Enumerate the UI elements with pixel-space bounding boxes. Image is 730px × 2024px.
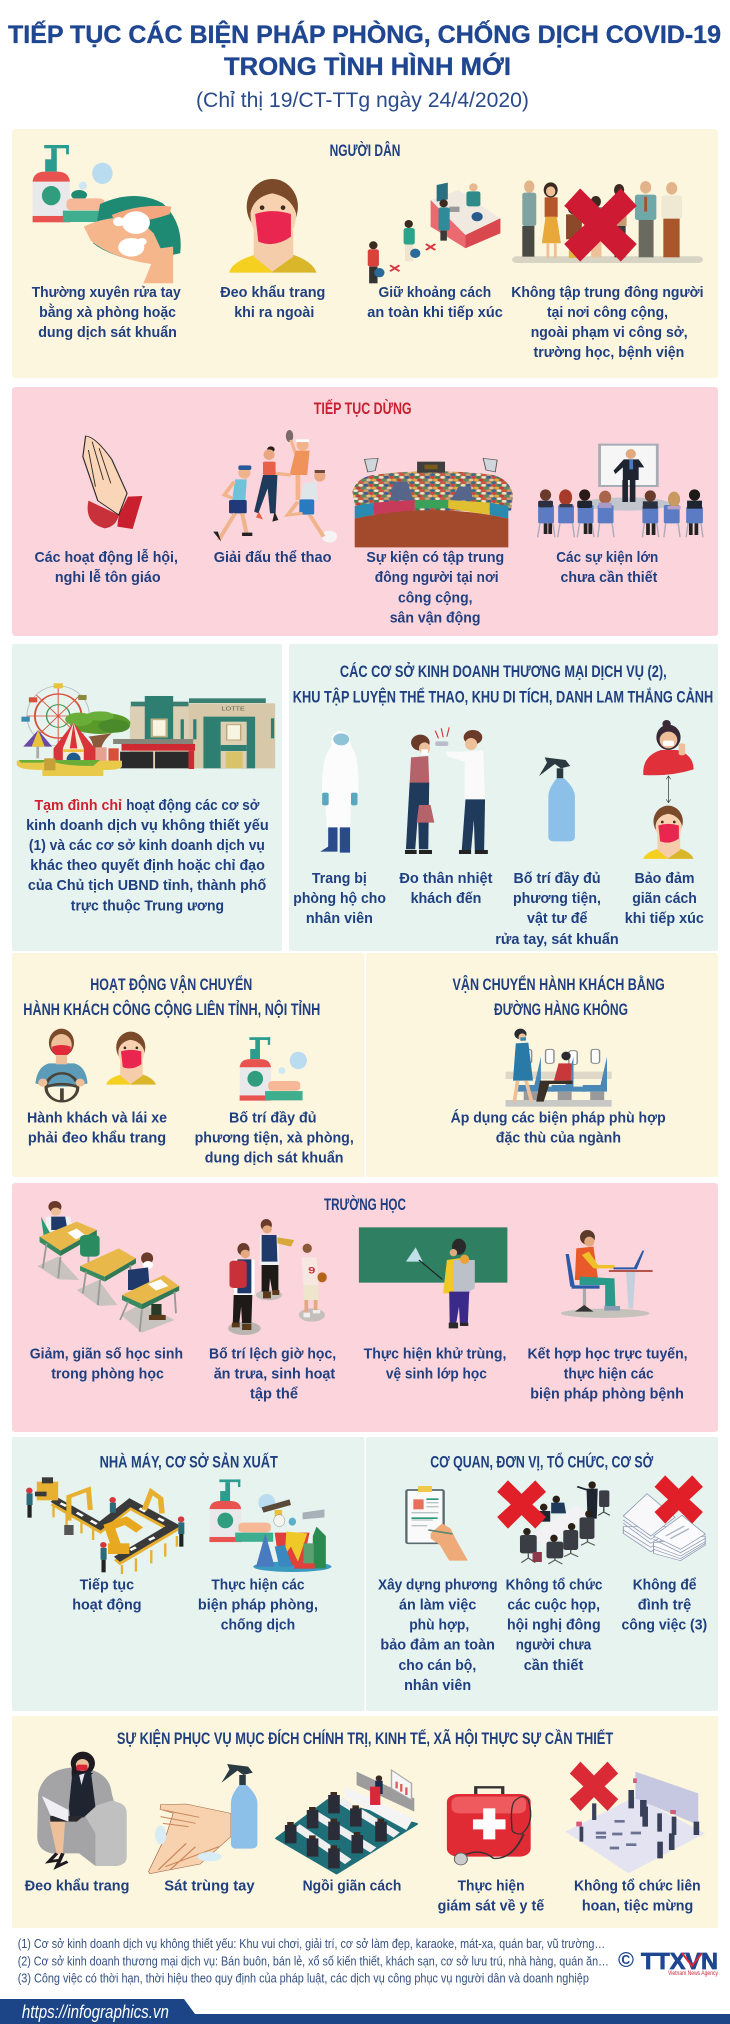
footnotes: (3) Công việc có thời hạn, thời hiệu theo quy định của pháp luật, các dịch vụ công phục vụ người dân và doanh nghiệp	[18, 1972, 589, 1986]
logo: TTXVN	[618, 1948, 718, 1977]
text: bố trí: Bố trí đầy đủ	[514, 870, 601, 887]
icon: driver and passenger with masks	[35, 1029, 156, 1101]
panel: cơ sở kinh doanh	[289, 644, 718, 951]
text: khử trùng: vệ sinh lớp học	[386, 1366, 487, 1382]
text: sát trùng tay: Sát trùng tay	[164, 1878, 255, 1894]
text: ngồi giãn cách: Ngồi giãn cách	[303, 1878, 401, 1894]
text: giám sát y tế: giám sát về y tế	[438, 1898, 545, 1914]
text: không để đình trệ	[622, 1576, 707, 1634]
text: không tổ chức liên hoan: Không tổ chức liên	[574, 1878, 701, 1894]
heading: hàng không: VẬN CHUYỂN HÀNH KHÁCH BẰNG	[452, 975, 665, 994]
text: giảm giãn: trong phòng học	[51, 1366, 164, 1382]
text: lễ hội: nghi lễ tôn giáo	[55, 569, 161, 586]
panel: cơ quan đơn vị	[366, 1437, 718, 1711]
footer bar: https://infographics.vn	[22, 2002, 169, 2022]
text: xây dựng phương án: phù hợp,	[409, 1616, 469, 1634]
text: giải đấu: Giải đấu thể thao	[214, 549, 332, 566]
text: khử trùng: Thực hiện khử trùng,	[364, 1346, 506, 1362]
text: rửa tay: dung dịch sát khuẩn	[38, 324, 177, 341]
title: TRONG TÌNH HÌNH MỚI	[224, 51, 511, 81]
text: không tập trung: ngoài phạm vi công sở,	[531, 324, 688, 341]
icon: airplane cabin	[506, 1029, 612, 1107]
text: sự kiện tập trung	[366, 549, 504, 626]
panel: tạm đình chỉ	[12, 644, 282, 951]
text: không để đình trệ: Không để	[633, 1576, 696, 1594]
text: bảo đảm giãn cách: khi tiếp xúc	[625, 910, 704, 927]
text: giảm giãn: Giảm, giãn số học sinh	[30, 1346, 183, 1362]
title: TIẾP TỤC CÁC BIỆN PHÁP PHÒNG, CHỐNG DỊCH COVID-19	[8, 19, 721, 49]
icon: two people distancing	[643, 720, 694, 859]
text: rửa tay	[32, 284, 181, 341]
text: không tập trung: Không tập trung đông người	[511, 284, 704, 301]
text: sự kiện tập trung: đông người tại nơi	[375, 569, 499, 586]
panel: vận chuyển công cộng	[12, 953, 364, 1177]
logo: TTXVN: TTXVN	[641, 1948, 718, 1974]
icon: clipboard plan	[406, 1486, 468, 1561]
text: lễ hội: Các hoạt động lễ hội,	[34, 549, 178, 566]
text: xây dựng phương án: Xây dựng phương	[378, 1576, 498, 1594]
text: bảo đảm giãn cách	[625, 870, 704, 927]
text: sự kiện lớn: Các sự kiện lớn	[556, 549, 658, 566]
panel: sự kiện	[12, 1716, 718, 1928]
text: trang bị: Trang bị	[312, 870, 367, 887]
text: tạm đình chỉ: hoạt động các cơ sở	[126, 797, 260, 814]
text: học trực tuyến: Kết hợp học trực tuyến,	[528, 1346, 688, 1362]
text: tiếp tục hoạt động: Tiếp tục	[80, 1576, 134, 1594]
label: mall name: LOTTE	[222, 707, 245, 712]
text: bố trí	[495, 870, 619, 948]
text: bảo đảm giãn cách: giãn cách	[632, 890, 697, 907]
text: học trực tuyến: biện pháp phòng bệnh	[530, 1386, 684, 1402]
text: thực hiện biện pháp: Thực hiện các	[211, 1576, 304, 1594]
text: bố trí xà phòng	[195, 1110, 354, 1166]
heading: hàng không: ĐƯỜNG HÀNG KHÔNG	[494, 1000, 628, 1019]
icon: stadium crowd	[352, 458, 513, 547]
heading: cơ quan: CƠ QUAN, ĐƠN VỊ, TỔ CHỨC, CƠ SỞ	[430, 1452, 654, 1472]
text: tạm đình chỉ: Tạm đình chỉ	[34, 797, 122, 814]
text: đeo khẩu trang: Đeo khẩu trang	[25, 1878, 129, 1894]
text: bố trí: vật tư để	[527, 910, 588, 927]
icon: woman in armchair with mask	[37, 1752, 127, 1867]
text: học trực tuyến	[528, 1346, 688, 1402]
logo: TTXVN: Vietnam News Agency	[668, 1971, 718, 1977]
footer bar	[0, 1999, 730, 2024]
text: không tổ chức họp: người chưa	[516, 1636, 592, 1654]
icon: amusement park and shopping mall	[17, 683, 275, 776]
heading: vận chuyển công cộng: HOẠT ĐỘNG VẬN CHUYỂN	[90, 975, 252, 994]
text: tiếp tục hoạt động: hoạt động	[72, 1596, 142, 1614]
text: hành khách và lái xe: Hành khách và lái xe	[27, 1110, 167, 1126]
icon: spray bottle	[539, 757, 575, 841]
text: áp dụng: Áp dụng các biện pháp phù hợp	[451, 1110, 666, 1126]
icon: students standing apart: 9	[308, 1266, 315, 1276]
text: không tổ chức họp	[506, 1576, 602, 1674]
text: đeo khẩu trang: Đeo khẩu trang	[220, 284, 325, 301]
text: đeo khẩu trang: khi ra ngoài	[234, 304, 314, 321]
text: giám sát y tế: Thực hiện	[458, 1878, 525, 1894]
text: đeo khẩu trang	[220, 284, 325, 321]
text: thực hiện biện pháp: biện pháp phòng,	[198, 1596, 318, 1614]
text: xây dựng phương án: án làm việc	[399, 1596, 476, 1614]
text: xây dựng phương án	[378, 1576, 498, 1694]
text: lệch giờ học: ăn trưa, sinh hoạt	[214, 1366, 335, 1382]
text: trang bị	[293, 870, 386, 927]
text: giữ khoảng cách: an toàn khi tiếp xúc	[367, 304, 503, 321]
icon: soap bottle	[240, 1037, 307, 1101]
text: đo thân nhiệt: khách đến	[411, 890, 481, 907]
heading: tiếp tục dừng: TIẾP TỤC DỪNG	[314, 399, 412, 418]
text: sự kiện tập trung: công cộng,	[398, 590, 472, 606]
text: không tổ chức liên hoan: hoan, tiệc mừng	[582, 1898, 693, 1914]
panel: tiếp tục dừng	[12, 387, 718, 636]
text: áp dụng	[451, 1110, 666, 1146]
text: giám sát y tế	[438, 1878, 545, 1914]
heading: vận chuyển công cộng: HÀNH KHÁCH CÔNG CỘNG LIÊN TỈNH, NỘI TỈNH	[23, 1000, 320, 1019]
icon: students standing apart	[228, 1219, 327, 1335]
icon: praying hands	[83, 436, 142, 529]
panel: người dân	[12, 129, 718, 378]
text: trang bị: nhân viên	[306, 910, 373, 927]
text: tiếp tục hoạt động	[72, 1576, 142, 1614]
panel: nhà máy	[12, 1437, 364, 1711]
text: hành khách và lái xe: phải đeo khẩu trang	[28, 1130, 166, 1146]
text: áp dụng: đặc thù của ngành	[496, 1130, 621, 1146]
text: rửa tay: bằng xà phòng hoặc	[39, 303, 176, 321]
text: không tổ chức họp: cần thiết	[524, 1657, 583, 1674]
text: sự kiện tập trung: Sự kiện có tập trung	[366, 549, 504, 566]
text: xây dựng phương án: bảo đảm an toàn	[380, 1636, 495, 1654]
text: xây dựng phương án: cho cán bộ,	[398, 1657, 476, 1674]
text: lễ hội	[34, 549, 178, 586]
text: rửa tay: Thường xuyên rửa tay	[32, 284, 181, 301]
text: không để đình trệ: công việc (3)	[622, 1616, 707, 1634]
text: trang bị: phòng hộ cho	[293, 890, 386, 907]
heading: cơ sở kinh doanh	[293, 662, 713, 706]
heading: trường học: TRƯỜNG HỌC	[324, 1195, 406, 1214]
text: không tập trung: trường học, bệnh viện	[534, 344, 684, 361]
panel: vận chuyển hàng không	[366, 953, 718, 1177]
heading: người dân: NGƯỜI DÂN	[330, 141, 400, 160]
text: hành khách và lái xe	[27, 1110, 167, 1146]
text: bảo đảm giãn cách: Bảo đảm	[634, 870, 694, 887]
text: bố trí xà phòng: Bố trí đầy đủ	[229, 1110, 316, 1126]
text: lệch giờ học: Bố trí lệch giờ học,	[209, 1346, 336, 1362]
text: giữ khoảng cách	[367, 284, 503, 321]
icon: chalkboard disinfection	[359, 1227, 507, 1328]
text: lệch giờ học	[209, 1346, 336, 1402]
text: bố trí xà phòng: dung dịch sát khuẩn	[205, 1150, 344, 1166]
icon: party floor with red cross	[566, 1762, 705, 1873]
icon: students at separated desks	[37, 1201, 179, 1333]
heading: nhà máy: NHÀ MÁY, CƠ SỞ SẢN XUẤT	[100, 1452, 278, 1472]
text: học trực tuyến: thực hiện các	[564, 1366, 654, 1382]
text: không tổ chức liên hoan	[574, 1878, 701, 1914]
heading: vận chuyển công cộng	[23, 975, 320, 1019]
text: không tập trung: tại nơi công cộng,	[547, 304, 668, 321]
text: không tổ chức họp: hội nghị đông	[507, 1616, 601, 1634]
text: tạm đình chỉ: của Chủ tịch UBND tỉnh, thành phố	[28, 877, 266, 894]
text: đo thân nhiệt: Đo thân nhiệt	[399, 870, 492, 887]
heading: hàng không	[452, 975, 665, 1019]
text: tạm đình chỉ: kinh doanh dịch vụ không thiết yếu	[26, 817, 269, 834]
icon: temperature check	[405, 727, 488, 854]
icon: crowd with red cross	[512, 180, 703, 263]
footnotes: (1) Cơ sở kinh doanh dịch vụ không thiết yếu: Khu vui chơi, giải trí, cơ sở làm đẹp, karaoke, mát-xa, quán bar, vũ trường…	[18, 1937, 605, 1951]
icon: meeting with red cross	[497, 1480, 610, 1564]
panel: trường học	[12, 1183, 718, 1432]
text: bố trí xà phòng: phương tiện, xà phòng,	[195, 1130, 354, 1146]
footnotes: (2) Cơ sở kinh doanh thương mại dịch vụ: Bán buôn, bán lẻ, xổ số kiến thiết, khách sạn, cơ sở lưu trú, nhà hàng, quán ăn…	[18, 1954, 609, 1968]
icon: athletes	[213, 430, 337, 543]
icon: queue at counter keeping distance	[368, 183, 500, 283]
text: thực hiện biện pháp	[198, 1576, 318, 1634]
text: tạm đình chỉ: (1) và các cơ sở kinh doanh dịch vụ	[29, 837, 265, 854]
text: bố trí: rửa tay, sát khuẩn	[495, 931, 619, 948]
icon: hands and sanitizer spray	[148, 1764, 257, 1874]
text: sự kiện tập trung: sân vận động	[390, 610, 480, 626]
text: khử trùng	[364, 1346, 506, 1382]
icon: red medical kit	[447, 1787, 531, 1865]
text: giảm giãn	[30, 1346, 183, 1382]
icon: online learning	[561, 1230, 653, 1318]
icon: person with mask	[229, 179, 317, 273]
text: giữ khoảng cách: Giữ khoảng cách	[378, 284, 491, 301]
title	[8, 19, 721, 81]
text: không để đình trệ: đình trệ	[638, 1596, 691, 1614]
text: sự kiện lớn: chưa cần thiết	[560, 569, 657, 586]
icon: hand washing with soap	[33, 145, 181, 283]
icon: protective suit	[320, 731, 359, 853]
text: thực hiện biện pháp: chống dịch	[221, 1616, 295, 1634]
text: lệch giờ học: tập thể	[250, 1386, 298, 1402]
text: xây dựng phương án: nhân viên	[404, 1677, 471, 1694]
footnotes	[18, 1937, 609, 1986]
text: tạm đình chỉ: trực thuộc Trung ương	[71, 898, 224, 914]
icon: presenter and audience	[538, 445, 703, 537]
text: tạm đình chỉ	[26, 797, 269, 914]
text: không tập trung	[511, 284, 704, 361]
logo: TTXVN: ©	[618, 1949, 635, 1972]
icon: stacks of papers with red cross	[623, 1475, 705, 1561]
icon: conference hall with spaced seating	[277, 1770, 417, 1873]
icon: soap and cleaning supplies	[209, 1479, 331, 1572]
subtitle: (Chỉ thị 19/CT-TTg ngày 24/4/2020)	[196, 89, 529, 112]
text: đo thân nhiệt	[399, 870, 492, 907]
icon: factory conveyor	[26, 1477, 184, 1574]
text: không tổ chức họp: Không tổ chức	[506, 1576, 602, 1594]
text: sự kiện lớn	[556, 549, 658, 586]
text: bố trí: phương tiện,	[513, 890, 601, 907]
text: không tổ chức họp: các cuộc họp,	[507, 1596, 600, 1614]
text: tạm đình chỉ: khác theo quyết định hoặc chỉ đạo	[30, 857, 265, 874]
